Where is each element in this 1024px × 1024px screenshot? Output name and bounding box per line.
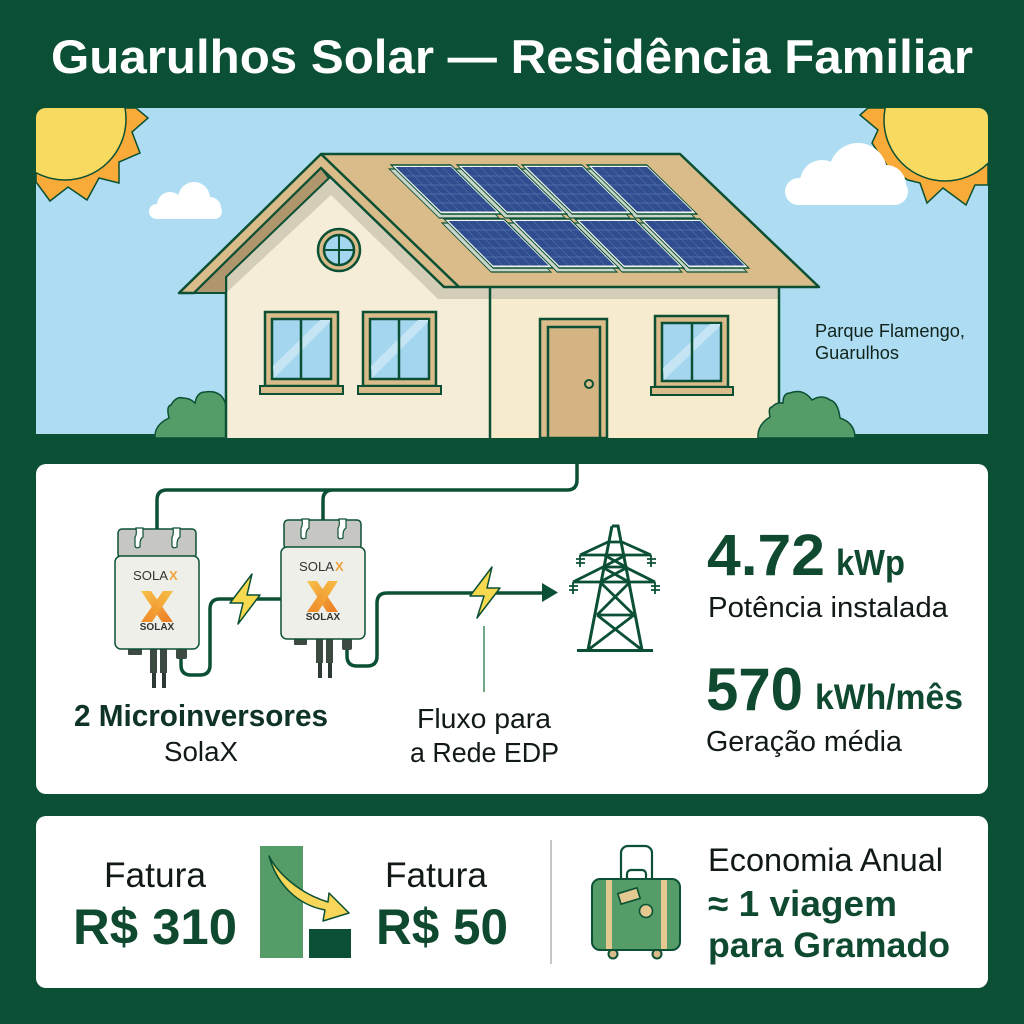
bill before	[73, 856, 237, 955]
round window	[318, 229, 360, 271]
panel: system diagram	[36, 464, 988, 794]
title: Guarulhos Solar — Residência Familiar	[51, 30, 973, 83]
stat: monthly generation	[706, 656, 963, 758]
door	[540, 319, 607, 438]
annual savings text: Economia Anual	[708, 842, 943, 878]
main roof	[179, 154, 819, 293]
microinverter 1: X	[169, 568, 178, 583]
wiring from house	[157, 464, 577, 530]
location label	[815, 321, 965, 363]
microinverter 2	[281, 519, 365, 678]
icon: transmission tower	[569, 526, 660, 650]
microinverter 1: SOLA	[133, 568, 168, 583]
panel: house scene	[36, 108, 988, 438]
location label: Parque Flamengo,	[815, 321, 965, 341]
microinverter 2: X	[335, 559, 344, 574]
annual savings text: ≈ 1 viagem	[708, 883, 897, 924]
panel: savings	[36, 816, 988, 988]
stat: monthly generation: Geração média	[706, 726, 903, 758]
microinverter 1: SOLAX	[140, 622, 175, 633]
microinverter 2: SOLAX	[306, 612, 341, 623]
label: microinverters	[74, 699, 328, 767]
stat: monthly generation: kWh/mês	[815, 678, 963, 717]
icon: right sun	[859, 108, 988, 206]
solar panels	[385, 165, 753, 272]
icon: left sun	[36, 108, 149, 202]
house walls	[226, 178, 490, 438]
label: grid flow: a Rede EDP	[410, 737, 559, 768]
label: grid flow	[410, 703, 559, 768]
microinverter 2: SOLA	[299, 559, 334, 574]
window 1	[260, 312, 343, 394]
stat: installed power: 4.72	[707, 523, 825, 588]
arrow to grid	[542, 583, 558, 602]
icon: right bush	[758, 392, 855, 438]
bill before: R$ 310	[73, 899, 237, 955]
wall shadow	[226, 178, 779, 299]
label: grid flow: Fluxo para	[417, 703, 551, 734]
stat: installed power	[707, 523, 949, 624]
wire to grid	[347, 593, 545, 666]
microinverter 1	[115, 528, 199, 688]
stat: monthly generation: 570	[706, 656, 803, 723]
leader line	[483, 626, 485, 692]
annual savings text: para Gramado	[708, 926, 950, 965]
stat: installed power: kWp	[836, 542, 905, 583]
gable underside	[194, 168, 329, 293]
icon: suitcase	[592, 846, 680, 958]
icon: lightning bolt 2	[470, 567, 500, 618]
bill after: R$ 50	[376, 899, 508, 955]
bar chart: bill reduction	[260, 846, 351, 958]
house	[179, 154, 819, 438]
icon: left bush	[155, 392, 226, 438]
stat: installed power: Potência instalada	[708, 592, 949, 624]
wire between inverters	[181, 599, 281, 675]
label: microinverters: SolaX	[164, 736, 238, 767]
label: microinverters: 2 Microinversores	[74, 699, 328, 733]
annual savings text	[708, 842, 950, 965]
icon: lightning bolt 1	[230, 574, 260, 624]
bill after	[376, 856, 508, 955]
bill after: Fatura	[385, 856, 488, 895]
sky background	[36, 108, 988, 434]
window 2	[358, 312, 441, 394]
bill before: Fatura	[104, 856, 207, 895]
window 3	[651, 316, 733, 395]
location label: Guarulhos	[815, 343, 899, 363]
icon: right cloud	[785, 143, 908, 205]
icon: left cloud	[149, 182, 222, 219]
